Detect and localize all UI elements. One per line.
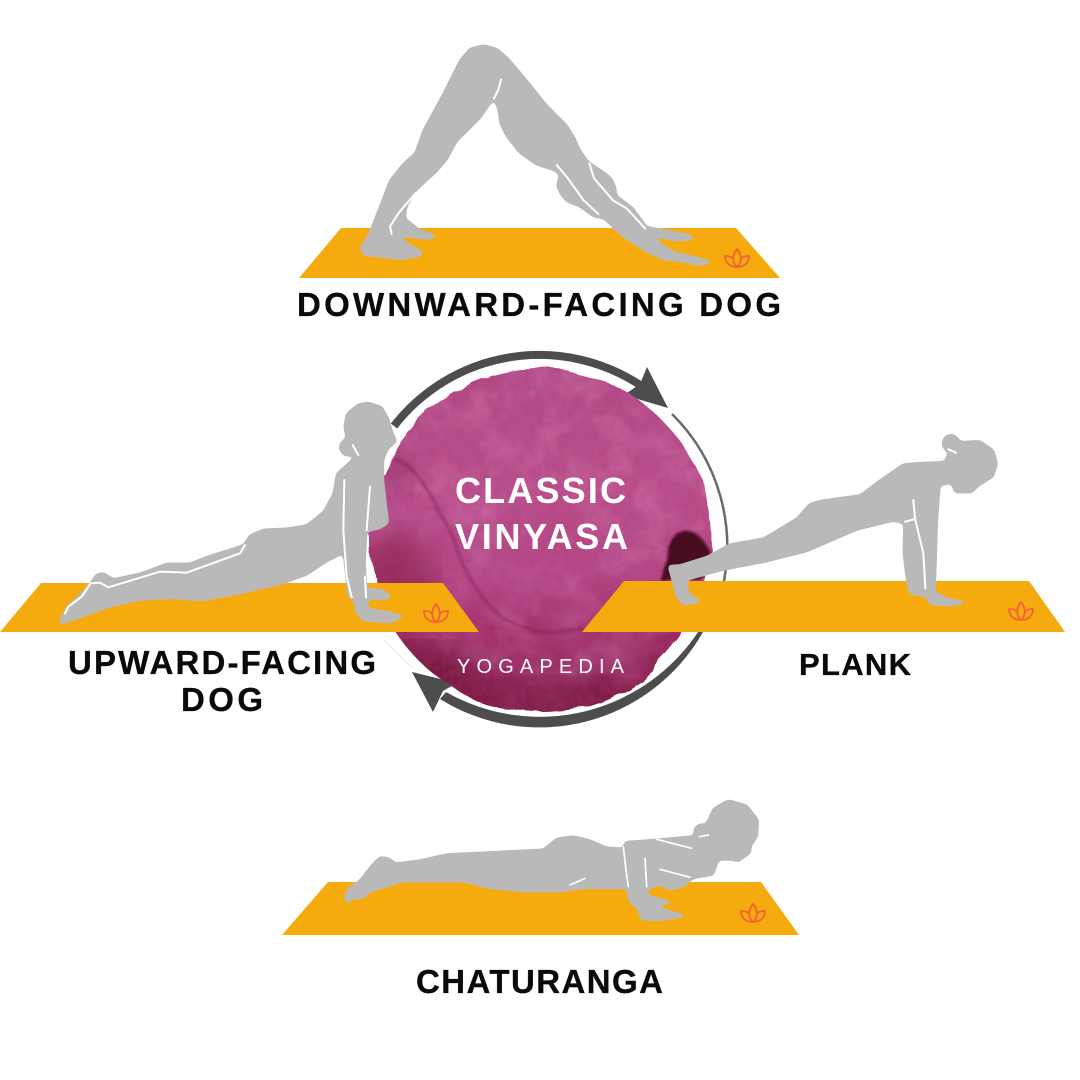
yoga mat	[0, 583, 479, 632]
label: DOG	[181, 681, 263, 718]
icon: lotus	[1009, 602, 1033, 620]
figure detail lines	[570, 835, 708, 887]
label: CHATURANGA	[416, 963, 663, 1000]
title: VINYASA	[455, 516, 628, 557]
figure: upward dog	[59, 402, 403, 623]
icon: lotus	[725, 249, 749, 267]
panel: downward-facing dog	[297, 45, 781, 323]
yoga mat	[582, 581, 1065, 632]
title	[455, 470, 628, 557]
icon: lotus	[424, 604, 448, 622]
panel: plank	[582, 435, 1065, 682]
figure detail lines	[905, 449, 956, 588]
dark stain	[662, 529, 710, 582]
arrow: right thin arc	[672, 414, 727, 590]
circular arrows	[384, 355, 727, 727]
arrow: left faint arc	[384, 640, 412, 668]
yoga mat	[282, 882, 799, 935]
brand: Yogapedia: YOGAPEDIA	[457, 656, 625, 678]
figure: chaturanga	[345, 800, 758, 920]
watercolor circle	[368, 366, 713, 712]
arrow: top clockwise	[394, 355, 668, 426]
label: PLANK	[799, 647, 912, 682]
icon: lotus	[741, 904, 765, 922]
figure detail lines	[65, 445, 370, 613]
yoga mat	[299, 228, 780, 278]
watercolor shading	[368, 366, 713, 712]
title: CLASSIC	[455, 470, 626, 511]
panel: upward-facing dog	[0, 402, 479, 718]
figure: downward dog	[361, 45, 712, 265]
figure detail lines	[390, 79, 645, 234]
panel: chaturanga	[282, 800, 799, 1000]
label: UPWARD-FACING	[68, 644, 376, 681]
figure: plank	[668, 435, 997, 606]
label: DOWNWARD-FACING DOG	[297, 286, 781, 323]
label	[68, 644, 376, 718]
arrow: bottom clockwise	[412, 629, 703, 727]
